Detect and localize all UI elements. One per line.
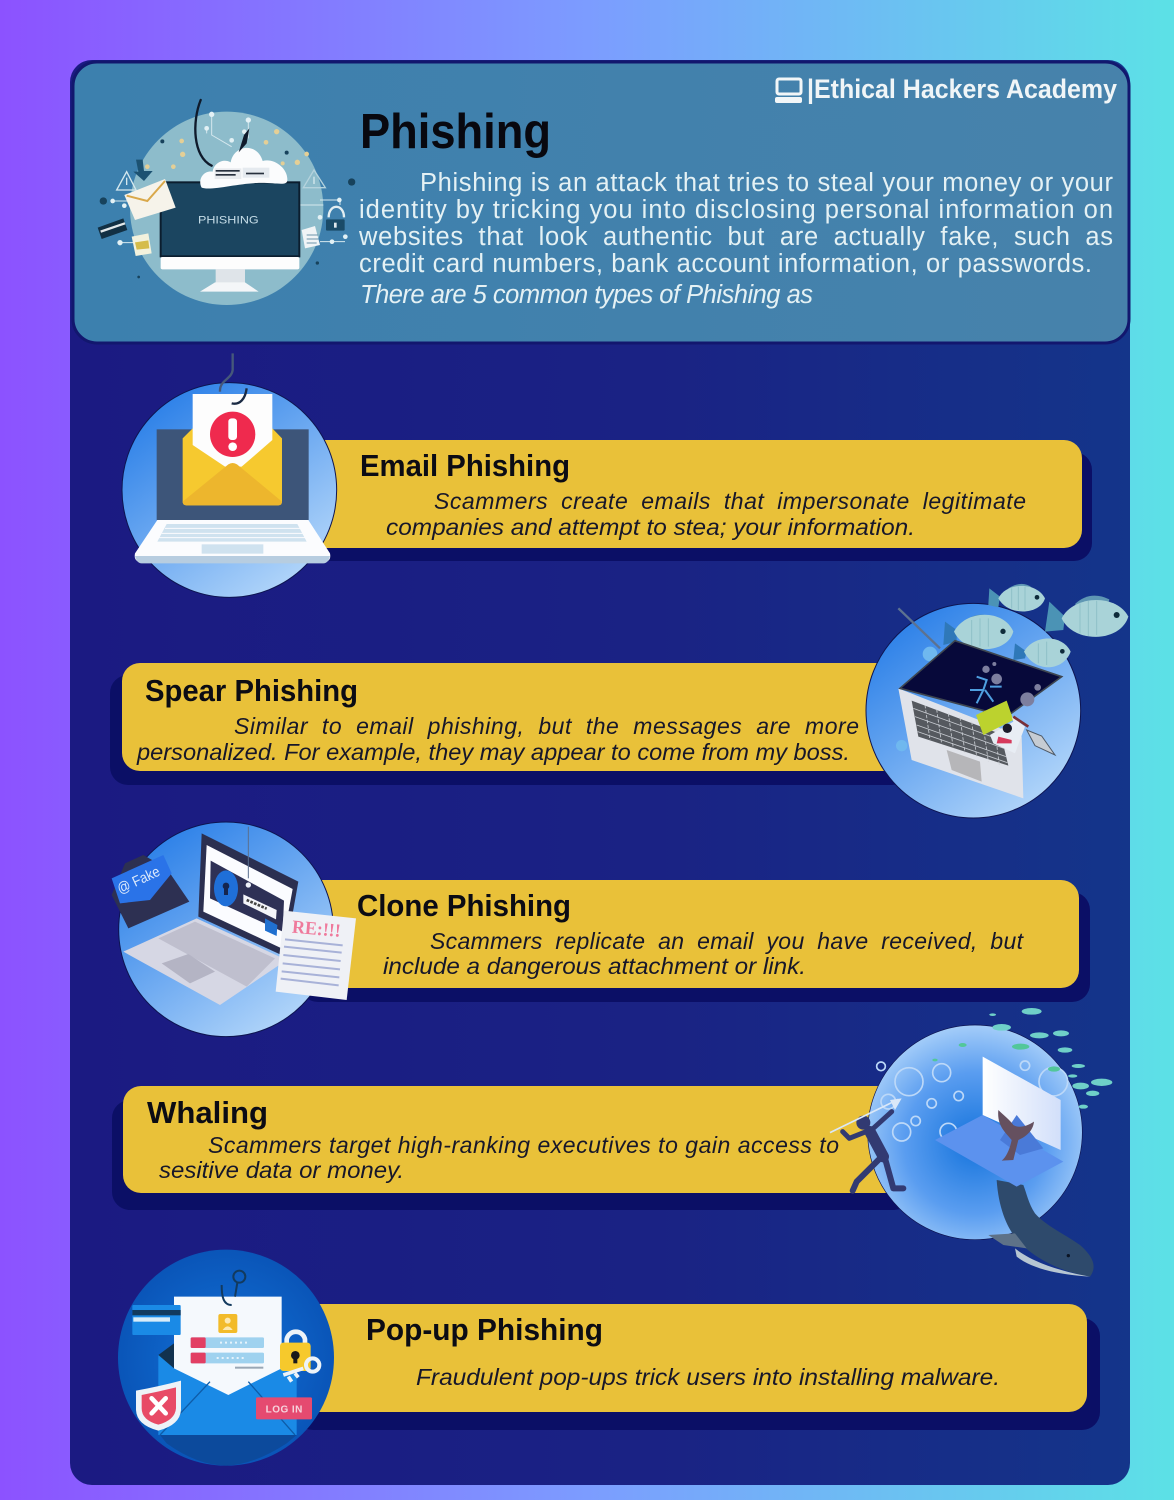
description: Similar to email phishing, but the messages are more: [234, 713, 859, 739]
description: [386, 488, 1026, 540]
description: personalized. For example, they may appear to come from my boss.: [136, 739, 850, 765]
header description: Phishing is an attack that tries to steal your money or your: [420, 169, 1114, 197]
description: Scammers target high-ranking executives to gain access to: [208, 1132, 839, 1158]
banner shadow: [295, 1318, 1100, 1430]
header background: [73, 62, 1129, 343]
heading: Pop-up Phishing: [366, 1312, 603, 1347]
banner shadow: [110, 675, 910, 785]
banner: [300, 1304, 1087, 1412]
icon: phishing monitor illustration: [98, 100, 355, 305]
icon: pop-up login envelope: LOG IN: [266, 1404, 302, 1415]
banner: [122, 663, 900, 771]
fish group: [943, 584, 1128, 667]
heading: Spear Phishing: [145, 673, 358, 708]
icon: email alert laptop: [122, 353, 337, 597]
school of small fish: [989, 1008, 1112, 1109]
description: include a dangerous attachment or link.: [383, 953, 806, 979]
banner: [300, 880, 1079, 988]
card: Whaling: [112, 1008, 1112, 1277]
title: Phishing: Phishing: [360, 105, 551, 159]
icon: clone laptop with fake email: @ Fake: [115, 864, 163, 898]
banner: [300, 440, 1082, 548]
header description: identity by tricking you into disclosing personal information on: [359, 196, 1113, 224]
card: Pop-up Phishing: [118, 1250, 1100, 1466]
header panel: [73, 62, 1129, 343]
icon: spear laptop and fish: [866, 584, 1128, 818]
card: Spear Phishing: [110, 584, 1128, 818]
description: [159, 1132, 839, 1183]
header description: There are 5 common types of Phishing as: [360, 281, 813, 309]
description: companies and attempt to stea; your information.: [386, 514, 915, 540]
heading: Email Phishing: [360, 448, 570, 483]
banner shadow: [300, 452, 1092, 561]
heading: Whaling: [147, 1095, 268, 1130]
description: Scammers create emails that impersonate legitimate: [434, 488, 1026, 514]
description: [383, 928, 1025, 979]
heading: Clone Phishing: [357, 888, 571, 923]
icon: clone laptop with fake email: RE:!!!: [291, 917, 342, 942]
description: [136, 713, 859, 765]
icon: laptop logo: [775, 79, 802, 103]
banner shadow: [300, 892, 1090, 1002]
description: Fraudulent pop-ups trick users into installing malware.: [416, 1364, 1000, 1390]
header description: credit card numbers, bank account information, or passwords.: [359, 250, 1092, 278]
card: Clone Phishing: [112, 822, 1090, 1037]
banner shadow: [112, 1100, 912, 1210]
description: sesitive data or money.: [159, 1157, 404, 1183]
header description: websites that look authentic but are actually fake, such as: [358, 223, 1113, 251]
card: Email Phishing: [122, 353, 1092, 597]
banner: [123, 1086, 900, 1193]
logo: Ethical Hackers Academy: [775, 74, 1117, 104]
icon: pop-up login envelope: [118, 1250, 334, 1466]
logo text: |Ethical Hackers Academy: [807, 74, 1117, 104]
header description: [358, 169, 1114, 309]
icon: phishing monitor illustration: PHISHING: [198, 215, 259, 227]
icon: whale laptop and harpooner: [830, 1008, 1112, 1277]
description: Scammers replicate an email you have received, but: [430, 928, 1025, 954]
icon: clone laptop with fake email: [112, 822, 356, 1037]
